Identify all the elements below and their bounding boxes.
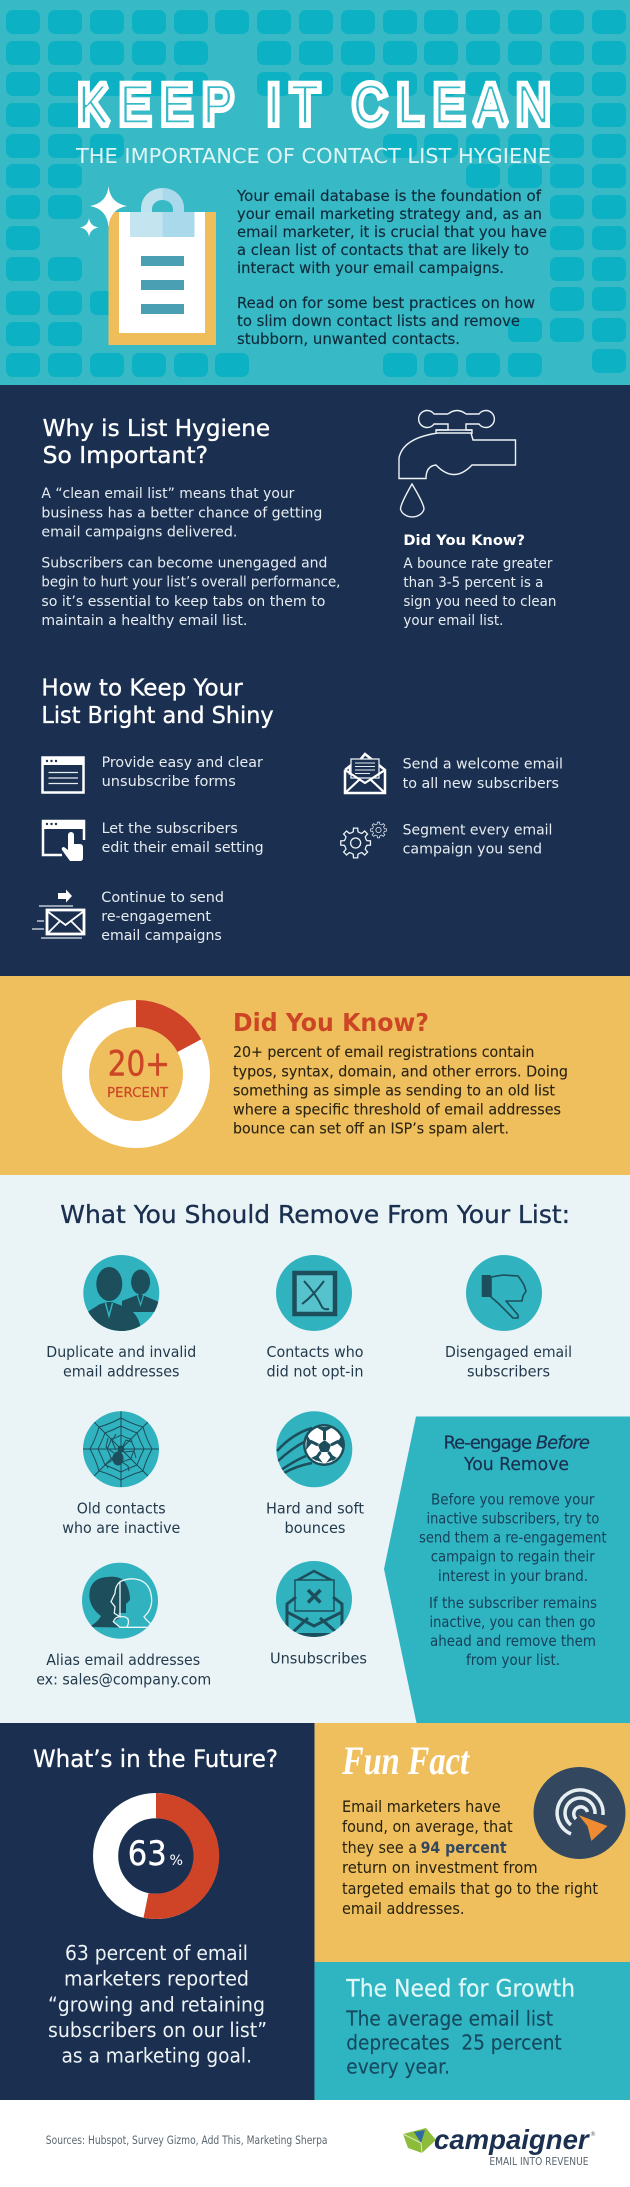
label [266,1500,364,1537]
text block: something as simple as sending to an old list [233,1082,555,1100]
panel: what's in the future [0,1723,315,2100]
subtitle: THE IMPORTANCE OF CONTACT LIST HYGIENE [75,144,551,168]
icon: browser with hand cursor [42,820,85,861]
item: alias addresses [36,1563,211,1689]
tip: re-engagement campaigns [32,890,224,944]
text block: they see a [342,1838,417,1857]
text block [342,1797,598,1918]
heading: how to keep your list [41,676,274,729]
item: did not opt in [266,1255,364,1380]
label: bounces [284,1519,346,1537]
label: Hard and soft [266,1500,364,1518]
label: ex: sales@company.com [36,1671,211,1689]
text block [48,1941,267,2068]
logo: campaigner: campaigner [434,2124,591,2155]
tip: unsubscribe forms [42,755,263,792]
icon: soccer ball [276,1411,352,1487]
tip text: to all new subscribers [403,776,559,792]
callout: re-engage before you remove: interest in your brand. [438,1567,588,1585]
callout: re-engage before you remove: If the subscriber remains [429,1594,597,1612]
callout: re-engage before you remove: campaign to regain their [431,1548,595,1566]
icon: spider web [83,1411,159,1487]
text block: clean email list: email campaigns delivered. [41,525,237,541]
icon: faucet [399,410,516,517]
text block: typos, syntax, domain, and other errors. Doing [233,1063,568,1081]
panel: need for growth [315,1962,630,2100]
intro text: email marketer, it is crucial that you have [237,223,547,241]
panel: footer [0,2100,630,2187]
callout: did you know bounce rate: than 3-5 percent is a [403,575,543,591]
text block: where a specific threshold of email addresses [233,1101,561,1119]
heading: why is list hygiene important [43,416,270,469]
tip: segment campaigns [341,822,552,858]
text block: 20+ percent of email registrations contain [233,1043,534,1061]
panel: hero header [0,0,630,385]
sources: Sources: Hubspot, Survey Gizmo, Add This, Marketing Sherpa [46,2133,328,2147]
tip text: campaign you send [403,842,542,858]
tip text: Continue to send [101,890,224,906]
icon: target with cursor [534,1767,626,1859]
icon: gears [341,822,386,858]
item: bounces [266,1411,364,1537]
panel: did you know 20 percent [0,976,630,1175]
heading: What You Should Remove From Your List: [60,1200,570,1229]
text block: clean email list: begin to hurt your list’s overall performance, [41,575,340,591]
intro text: to slim down contact lists and remove [237,312,520,330]
tip text: edit their email setting [102,840,264,856]
intro text: Your email database is the foundation of [236,187,542,205]
logo: campaigner: EMAIL INTO REVENUE [489,2156,589,2168]
text block: email addresses. [342,1899,464,1918]
panel: list hygiene navy section [0,385,630,976]
item: duplicate addresses [46,1255,196,1380]
icon: two heads [82,1563,158,1639]
tip text [102,821,264,856]
donut chart: 63 percent: 63 [128,1834,167,1874]
label [62,1500,180,1537]
callout: re-engage before you remove: You Remove [463,1454,569,1475]
text block [233,1043,568,1138]
text block: return on investment from [342,1858,538,1877]
text block: clean email list [41,486,340,629]
label: Disengaged email [445,1343,572,1361]
tip text: unsubscribe forms [102,774,236,790]
logo: campaigner: ® [590,2131,596,2138]
callout: did you know bounce rate: A bounce rate greater [403,556,552,572]
text block: “growing and retaining [48,1993,265,2017]
tip text [403,822,552,858]
intro text: a clean list of contacts that are likely to [237,241,529,259]
icon: clipboard with sparkles [80,186,216,345]
icon: x checkbox [276,1255,352,1331]
tip: welcome email [345,754,563,793]
label: did not opt-in [266,1362,364,1380]
label [36,1651,211,1689]
icon: sending envelope [32,890,84,938]
tip text [101,890,224,944]
callout: re-engage before you remove: send them a re-engagement [419,1529,607,1547]
donut chart: 20+ percent: PERCENT [107,1085,169,1101]
callout: re-engage before you remove: Before you remove your [431,1490,595,1508]
label: who are inactive [62,1519,180,1537]
heading: The Need for Growth [345,1975,575,2003]
text block: as a marketing goal. [62,2044,252,2068]
text block: subscribers on our list” [48,2018,267,2042]
icon: browser form [42,757,84,792]
tip text: Segment every email [403,822,552,838]
label: Contacts who [266,1343,364,1361]
intro text: stubborn, unwanted contacts. [237,330,460,348]
text block: 63 percent of email [65,1941,248,1965]
donut chart: 20+ percent: 20+ [108,1045,170,1085]
label [445,1343,572,1380]
text block: bounce can set off an ISP’s spam alert. [233,1120,509,1138]
heading: Fun Fact [341,1738,471,1783]
tip text: email campaigns [101,928,222,944]
callout: re-engage before you remove: from your list. [466,1651,560,1669]
text block: clean email list: maintain a healthy email list. [41,613,247,629]
tip: edit email setting [42,820,264,861]
text block: Email marketers have [342,1797,501,1816]
tip text: Send a welcome email [403,757,563,773]
icon: envelope with x [276,1561,352,1638]
text block: marketers reported [64,1967,249,1991]
intro text: interact with your email campaigns. [237,259,504,277]
text block: targeted emails that go to the right [342,1879,598,1898]
label: email addresses [63,1362,180,1380]
callout: re-engage before you remove: inactive, you can then go [430,1613,596,1631]
intro text [236,187,547,348]
label: Unsubscribes [270,1649,367,1667]
text block: clean email list: business has a better chance of getting [41,505,322,521]
icon: open envelope with letter [345,754,385,793]
tip text [403,757,563,792]
heading: Did You Know? [233,1008,429,1037]
tip text: re-engagement [101,909,211,925]
item: disengaged subscribers [445,1255,572,1380]
label: Duplicate and invalid [46,1343,196,1361]
text block: 94 percent [421,1838,507,1857]
text block: every year. [346,2054,450,2078]
intro text: your email marketing strategy and, as an [237,205,542,223]
callout: re-engage before you remove: inactive subscribers, try to [426,1509,599,1527]
panel: fun fact [315,1723,630,1962]
title: KEEP IT CLEAN [78,74,550,135]
heading: What’s in the Future? [33,1745,278,1773]
callout: did you know bounce rate [403,533,556,629]
heading: how to keep your list: How to Keep Your [41,676,243,702]
callout: did you know bounce rate: Did You Know? [403,533,525,549]
callout: did you know bounce rate: your email list. [403,613,503,629]
label: subscribers [467,1362,550,1380]
label [46,1343,196,1380]
label: Old contacts [77,1500,166,1518]
text block: clean email list: Subscribers can become unengaged and [41,555,327,571]
logo: campaigner [403,2124,596,2168]
text block [345,2006,562,2078]
text block: clean email list: A “clean email list” means that your [41,486,294,502]
text block: clean email list: so it’s essential to keep tabs on them to [41,594,326,610]
heading: how to keep your list: List Bright and Shiny [41,703,274,729]
donut chart: 63 percent [106,1793,219,1919]
item: unsubscribes [270,1561,367,1667]
callout: re-engage before you remove: Re-engage Before [444,1433,590,1454]
icon: thumbs down [466,1255,542,1331]
text block: The average email list [345,2006,553,2030]
intro text: Read on for some best practices on how [237,294,535,312]
text block: deprecates 25 percent [346,2030,562,2054]
panel: what you should remove [0,1175,630,1723]
donut chart: 20+ percent [76,1000,201,1134]
icon: two people [83,1255,159,1331]
callout: did you know bounce rate: sign you need to clean [403,594,556,610]
callout: re-engage before you remove [384,1416,630,1723]
text block: found, on average, that [342,1817,513,1836]
label: Alias email addresses [46,1651,200,1669]
callout: re-engage before you remove: ahead and remove them [430,1632,596,1650]
tip text: Let the subscribers [102,821,238,837]
heading: why is list hygiene important: Why is List Hygiene [43,416,270,442]
donut chart: 63 percent: % [170,1853,183,1869]
tip text [102,755,263,790]
item: old contacts [62,1411,180,1537]
tile background pattern [6,10,626,377]
heading: why is list hygiene important: So Important? [43,443,208,469]
label [266,1343,364,1380]
tip text: Provide easy and clear [102,755,263,771]
title: KEEP IT CLEAN [78,74,550,135]
